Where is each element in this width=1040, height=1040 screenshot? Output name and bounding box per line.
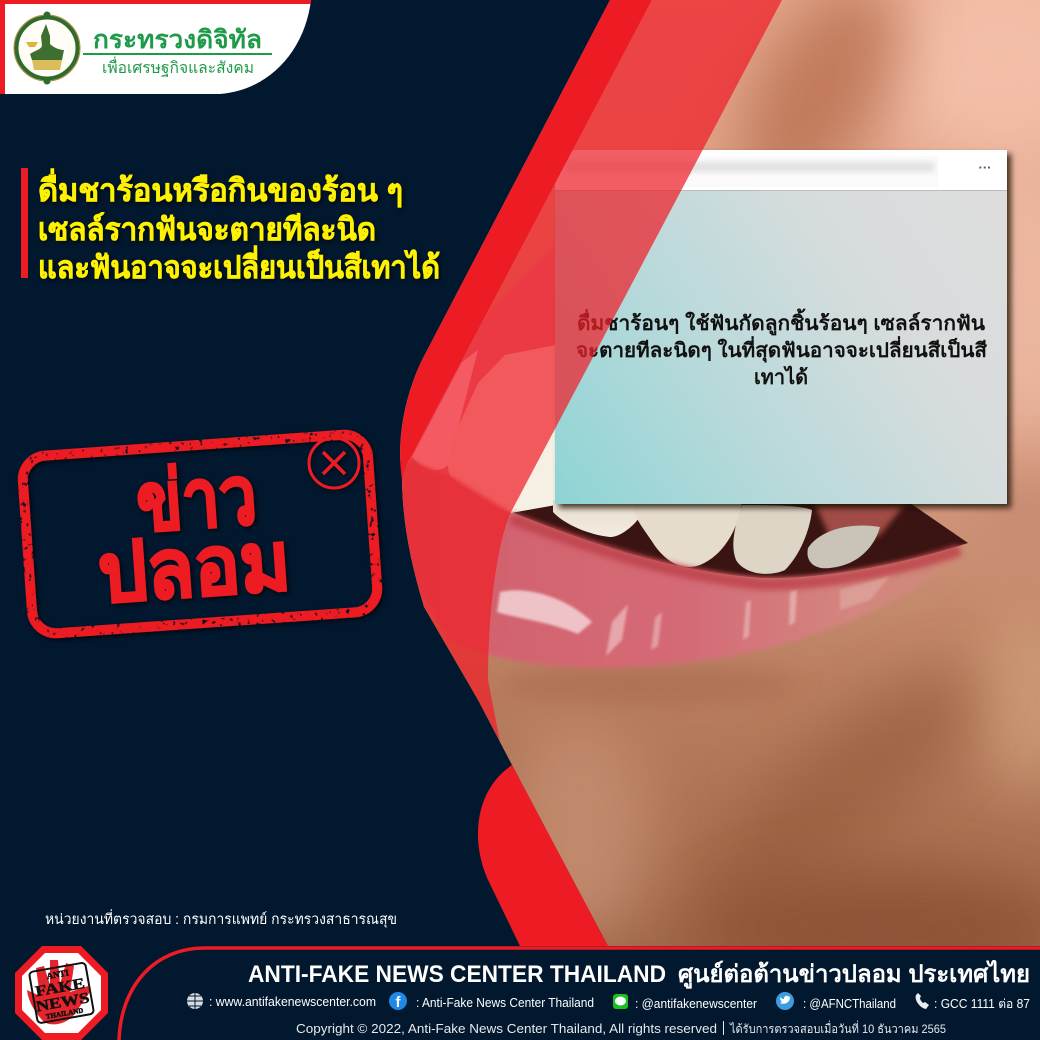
- lower lip: [400, 455, 968, 668]
- stamp word: fake: ข่าว: [134, 450, 260, 549]
- line contact: : @antifakenewscenter: [635, 997, 757, 1011]
- phone contact: [916, 993, 1030, 1011]
- ministry name: กระทรวงดิจิทัล: [93, 26, 262, 54]
- post text: ดื่มชาร้อนๆ ใช้ฟันกัดลูกชิ้นร้อนๆ เซลล์รากฟัน: [577, 308, 985, 337]
- copyright line: [296, 1020, 946, 1036]
- red hand: [27, 960, 90, 1024]
- cross icon: [309, 438, 359, 488]
- red translucent band: [402, 0, 782, 742]
- footer: [15, 946, 1040, 1040]
- lip shading under mouth: [511, 518, 960, 584]
- phone contact: : GCC 1111 ต่อ 87: [934, 997, 1030, 1011]
- logo header: [0, 0, 311, 94]
- blurred account name: [562, 156, 938, 187]
- white logo plate: [0, 0, 311, 94]
- post text: จะตายทีละนิดๆ ในที่สุดฟันอาจจะเปลี่ยนสีเป็นสี: [576, 335, 988, 363]
- headline text: และฟันอาจจะเปลี่ยนเป็นสีเทาได้: [38, 245, 440, 285]
- stamp lettering: ANTI: [46, 967, 70, 981]
- stamp lettering: [29, 962, 94, 1023]
- footer red outline: [119, 948, 1040, 1040]
- facebook contact: : Anti-Fake News Center Thailand: [416, 996, 594, 1010]
- facebook contact: [389, 992, 594, 1011]
- footer title: ANTI-FAKE NEWS CENTER THAILAND: [248, 961, 666, 988]
- post text: เทาได้: [754, 365, 808, 389]
- red edge: [0, 0, 311, 94]
- lip highlights: [497, 576, 890, 656]
- footer title: [248, 959, 1030, 989]
- red solid band: [400, 0, 652, 480]
- stamp lettering: FAKE: [34, 976, 86, 1000]
- card panel: [555, 150, 1007, 504]
- stamp lettering: NEWS: [35, 990, 91, 1015]
- red accent bar: [21, 168, 28, 278]
- green rule: [83, 53, 272, 55]
- ministry tagline: เพื่อเศรษฐกิจและสังคม: [102, 56, 254, 77]
- headline with red bar: [21, 168, 440, 285]
- red corner blob: [478, 765, 608, 946]
- footer panel: [118, 948, 1040, 1040]
- social post card: [555, 150, 1007, 504]
- headline text: เซลล์รากฟันจะตายทีละนิด: [38, 212, 376, 247]
- upper lip: [410, 250, 555, 460]
- stop sign logo: [15, 946, 108, 1040]
- copyright line: ได้รับการตรวจสอบเมื่อวันที่ 10 ธันวาคม 2565: [729, 1020, 946, 1036]
- fake news stamp: [21, 433, 379, 635]
- stamp frame: [21, 433, 379, 635]
- post text: [576, 308, 988, 389]
- footer title: ศูนย์ต่อต้านข่าวปลอม ประเทศไทย: [678, 959, 1030, 989]
- menu dots: ···: [978, 160, 992, 175]
- mouth interior: [511, 503, 968, 578]
- twitter contact: [776, 992, 896, 1011]
- teeth: [412, 345, 880, 574]
- twitter contact: : @AFNCThailand: [803, 997, 896, 1011]
- headline text: ดื่มชาร้อนหรือกินของร้อน ๆ: [38, 168, 403, 208]
- verifying agency: หน่วยงานที่ตรวจสอบ : กรมการแพทย์ กระทรวงสาธารณสุข: [45, 909, 397, 928]
- website contact: : www.antifakenewscenter.com: [209, 995, 376, 1009]
- stamp lettering: THAILAND: [45, 1006, 84, 1021]
- photo: smiling mouth close-up: [400, 0, 1040, 990]
- stamp word: news: ปลอม: [95, 516, 293, 620]
- line contact: [613, 994, 757, 1011]
- ministry emblem: [14, 12, 80, 84]
- facebook contact: f: [396, 994, 402, 1011]
- headline text: [38, 168, 440, 285]
- copyright line: Copyright © 2022, Anti-Fake News Center Thailand, All rights reserved: [296, 1022, 717, 1036]
